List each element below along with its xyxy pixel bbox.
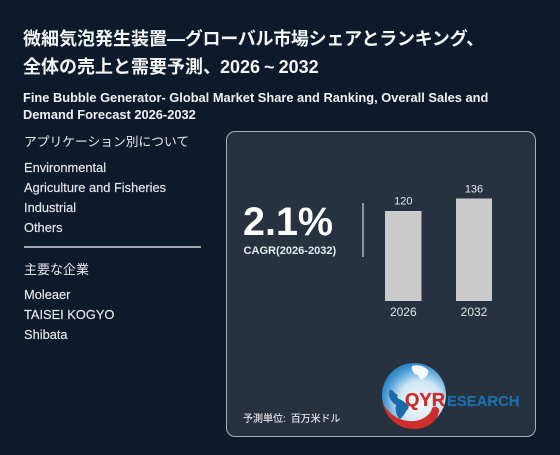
logo wordmark research: ESEARCH [447, 394, 520, 410]
list: applications: Industrial [24, 200, 76, 214]
list: companies: TAISEI KOGYO [24, 306, 114, 322]
CAGR value: 2.1% [243, 200, 333, 244]
list: applications: Environmental [24, 160, 106, 174]
heading: applications: アプリケーション別について [24, 134, 189, 149]
logo wordmark: QYR [405, 389, 445, 410]
list: companies: Moleaer [24, 286, 70, 302]
list: applications: Others [24, 220, 63, 234]
list: companies [24, 286, 114, 342]
panel divider [362, 203, 364, 257]
CAGR label: CAGR(2026-2032) [244, 245, 336, 257]
bar: 2026: 2026 [390, 305, 417, 319]
bar: 2026 [385, 196, 422, 319]
divider [24, 246, 201, 248]
forecast unit note: 予測単位: 百万米ドル [243, 414, 340, 425]
bar: 2032: 2032 [461, 305, 488, 319]
heading: key companies: 主要な企業 [24, 262, 89, 277]
subtitle [23, 90, 488, 122]
bar: 2032: 136 [465, 184, 483, 196]
bar chart [385, 184, 492, 319]
bar: 2032 [456, 184, 492, 319]
bar: 2026: 120 [394, 196, 412, 208]
globe [382, 363, 446, 429]
title: 全体の売上と需要予測、2026~2032 [23, 57, 319, 77]
list: companies: Shibata [24, 326, 68, 342]
logo: QYR Research [382, 363, 520, 429]
title: 微細気泡発生装置—グローバル市場シェアとランキング、 [23, 29, 484, 49]
list: applications: Agriculture and Fisheries [24, 180, 166, 194]
title [23, 29, 484, 77]
list: applications [24, 160, 166, 234]
subtitle: Fine Bubble Generator- Global Market Share and Ranking, Overall Sales and [23, 90, 488, 105]
panel: forecast [226, 131, 536, 437]
subtitle: Demand Forecast 2026-2032 [23, 107, 196, 122]
